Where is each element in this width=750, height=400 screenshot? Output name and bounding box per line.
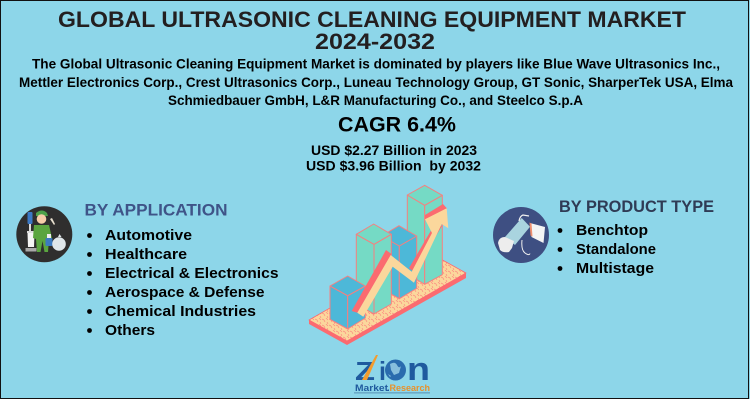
logo: Zion Market Research xyxy=(354,351,430,394)
bullet list: Automotive xyxy=(105,227,192,244)
bullet list: Healthcare xyxy=(105,246,187,263)
bullet list: Chemical Industries xyxy=(105,303,256,320)
market size figures xyxy=(306,143,481,174)
bar 1 xyxy=(330,276,365,329)
heading: BY APPLICATION xyxy=(84,202,228,220)
arrow xyxy=(352,204,448,317)
icon: ultrasonic device xyxy=(493,207,549,263)
bar 2 xyxy=(356,224,391,314)
description text: Schmiedbauer GmbH, L&R Manufacturing Co., and Steelco S.p.A xyxy=(168,92,583,108)
bullet list: Others xyxy=(105,322,155,339)
logo: Zion Market Research: Market xyxy=(355,383,389,394)
logo: Zion Market Research: n xyxy=(407,351,430,387)
CAGR value: CAGR 6.4% xyxy=(338,114,456,136)
logo: Zion Market Research: Research xyxy=(390,383,430,394)
description text: The Global Ultrasonic Cleaning Equipment Market is dominated by players like Blue Wave Ultrasonics Inc., xyxy=(32,56,720,72)
description text: Mettler Electronics Corp., Crest Ultrasonics Corp., Luneau Technology Group, GT Sonic, SharperTek USA, Elma xyxy=(19,74,733,90)
market size figures: USD $3.96 Billion by 2032 xyxy=(306,158,481,174)
title xyxy=(58,7,687,54)
platform xyxy=(309,252,466,345)
panel: by product type xyxy=(493,198,714,277)
bar 4 xyxy=(407,185,442,284)
title: GLOBAL ULTRASONIC CLEANING EQUIPMENT MARKET xyxy=(58,7,687,32)
title: 2024-2032 xyxy=(315,29,435,54)
bar 3 xyxy=(382,226,417,299)
bullet list xyxy=(558,222,656,277)
panel: by application xyxy=(16,202,279,339)
description text xyxy=(19,56,733,108)
bullet list: Electrical & Electronics xyxy=(105,265,278,282)
heading: BY PRODUCT TYPE xyxy=(559,198,714,216)
market size figures: USD $2.27 Billion in 2023 xyxy=(311,143,477,158)
bullet list xyxy=(87,227,278,339)
bullet list: Multistage xyxy=(576,260,654,277)
bullet list: Standalone xyxy=(576,241,656,258)
bullet list: Benchtop xyxy=(576,222,648,239)
bullet list: Aerospace & Defense xyxy=(105,284,264,301)
logo: Zion Market Research: i xyxy=(379,356,386,386)
logo: Zion Market Research: Z xyxy=(355,356,375,386)
icon: cleaning worker xyxy=(16,206,72,262)
chart: isometric rising bars xyxy=(309,185,466,345)
